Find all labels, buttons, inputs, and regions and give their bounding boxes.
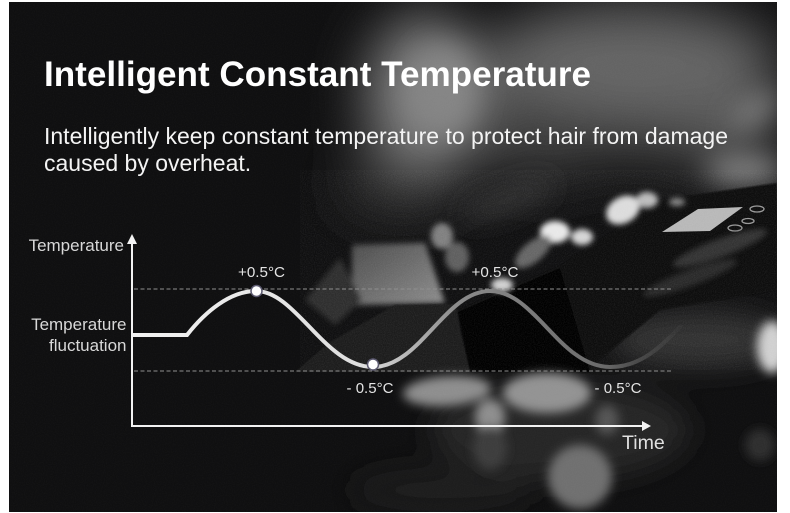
axis label: temperature fluctuation <box>31 315 126 355</box>
marker: trough <box>368 359 378 370</box>
fluctuation curve <box>133 291 682 367</box>
dashed limit lines <box>134 289 672 371</box>
board speckles <box>300 170 777 370</box>
description <box>44 123 728 176</box>
label: first peak: +0.5°C <box>238 264 285 281</box>
dark circuit board slab <box>295 183 777 372</box>
title: Intelligent Constant Temperature <box>44 55 591 94</box>
chart: temperature fluctuation <box>29 234 682 454</box>
label: first trough: - 0.5°C <box>346 380 394 397</box>
axis label: temperature fluctuation: Temperature <box>31 315 126 334</box>
label: second peak: +0.5°C <box>472 264 519 281</box>
axis label: temperature: Temperature <box>29 236 124 255</box>
mid-left chip shapes <box>305 243 445 325</box>
axis label: time: Time <box>622 432 665 454</box>
axis label: temperature fluctuation: fluctuation <box>49 336 126 355</box>
description: Intelligently keep constant temperature to protect hair from damage <box>44 123 728 149</box>
label: second trough: - 0.5°C <box>594 380 642 397</box>
temperature axis <box>127 234 137 427</box>
top smoke glow <box>340 5 780 215</box>
time axis <box>131 421 651 431</box>
bokeh highlights <box>431 190 685 292</box>
description: caused by overheat. <box>44 150 251 176</box>
chip on the board <box>662 207 743 232</box>
marker: peak <box>251 286 262 296</box>
